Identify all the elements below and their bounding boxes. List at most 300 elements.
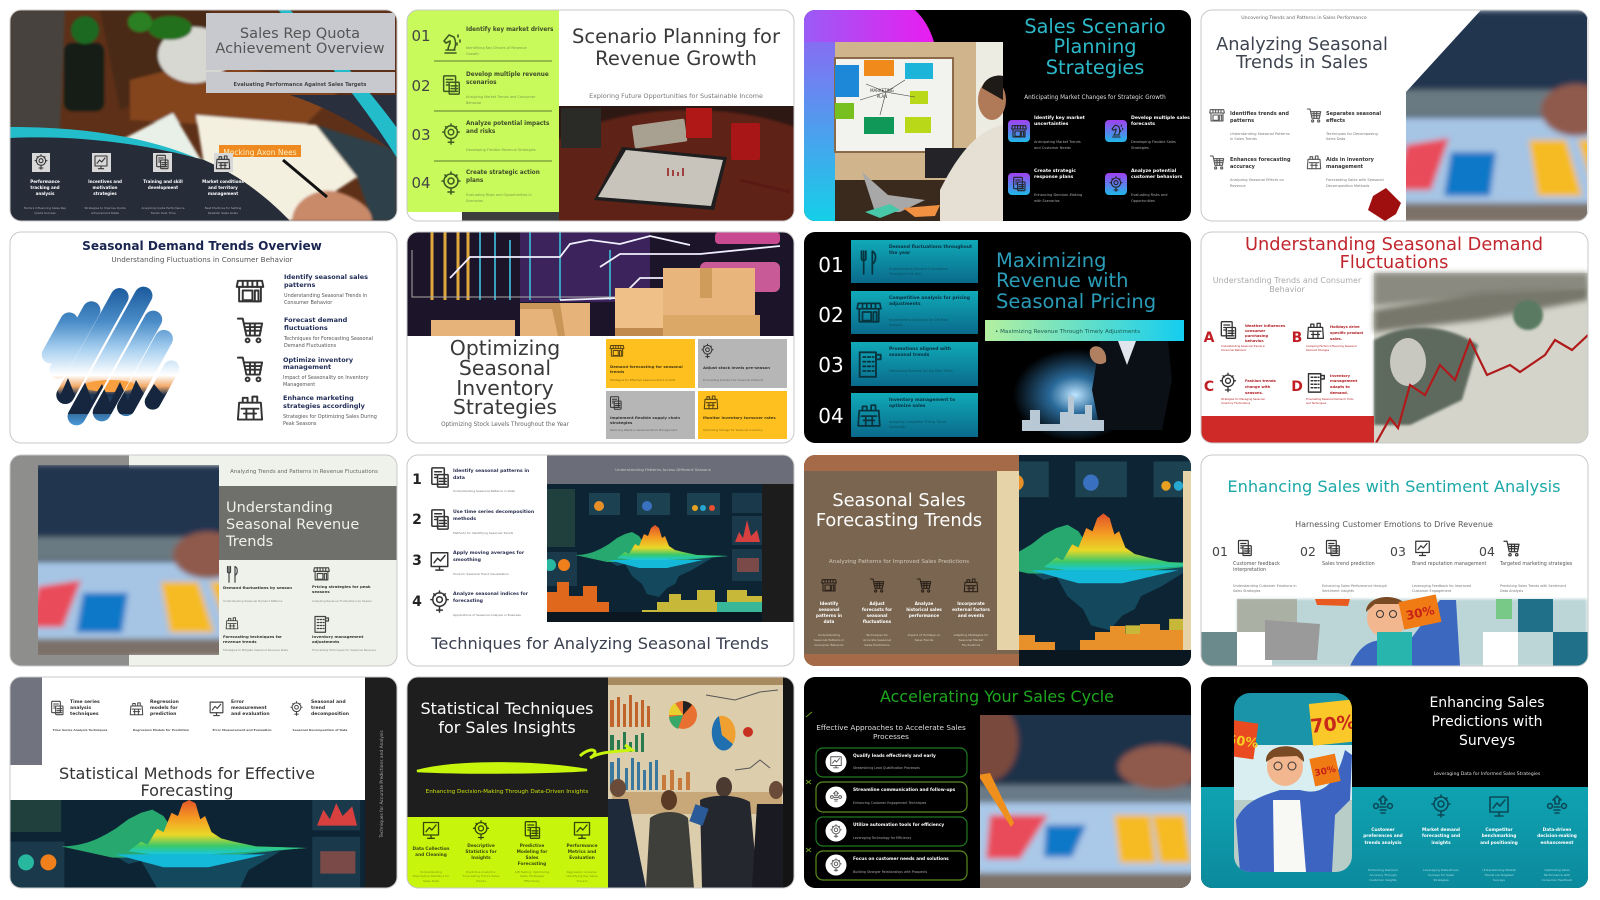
dark wave footer: [10, 137, 290, 221]
label: decomposition: [311, 711, 349, 717]
label: interpretation: [1233, 567, 1266, 573]
item: incorporate: [952, 579, 990, 647]
subtitle: Analyzing Patterns for Improved Sales Predictions: [829, 559, 969, 565]
label: Insights: [471, 855, 491, 861]
beige divider: [997, 471, 1019, 650]
subtitle box: [206, 72, 395, 93]
icon: document: [610, 397, 621, 409]
title: Optimizing: [450, 336, 560, 360]
icon: store: [1210, 110, 1224, 121]
label: methods: [453, 516, 476, 522]
dark side block: [762, 484, 794, 622]
title band: Seasonal Revenue: [226, 517, 359, 533]
header band: Understanding Patterns Across Different Seasons: [615, 467, 711, 472]
caption: Drivers: [577, 879, 588, 883]
title box: [206, 13, 395, 70]
caption: Customer Engagement: [1412, 589, 1452, 593]
panel: slide Seasonal Sales Forecasting Trends: [804, 414, 1341, 707]
label: Use time series decomposition: [453, 509, 534, 515]
label: Identify seasonal patterns in: [453, 468, 529, 474]
item: decision-making: [1537, 796, 1577, 882]
caption: Predictive Analytics:: [466, 870, 496, 874]
subtitle: Optimizing Stock Levels Throughout the Year: [441, 422, 570, 428]
label: Create strategic: [1034, 168, 1076, 174]
label: forecasting: [453, 598, 483, 604]
caption: Seasons: [889, 323, 903, 327]
illustration: cheering man in bookstore with blocks: 30%: [1405, 603, 1436, 623]
label: Optimize inventory: [283, 356, 354, 364]
label: Focus on customer needs and solutions: [853, 856, 949, 862]
label: Inventory management to: [889, 397, 955, 403]
item: forecasts: [1105, 115, 1190, 150]
step: automation: [816, 817, 967, 846]
icon: cart: [238, 358, 262, 381]
caption: Understanding Demand Fluctuations: [889, 267, 948, 271]
caption: Strategies for Effective Seasonal Stock Control: [610, 378, 675, 382]
icon: store: [237, 281, 263, 301]
caption: Evaluating Risks and Opportunities in: [466, 193, 532, 197]
subtitle: Leveraging Data for Informed Sales Strategies: [1434, 771, 1541, 777]
item 1: [412, 468, 529, 493]
label: development: [148, 185, 178, 190]
lime sidebar: [407, 10, 559, 212]
caption: Applications of Seasonal Analysis in Business: [453, 613, 521, 617]
item: time series: [52, 699, 108, 732]
lime footer: [407, 817, 608, 888]
panel: slide Seasonal Demand Trends Overview: [10, 232, 397, 443]
photo: pen pointing at blurred chart: [958, 701, 1202, 898]
step 01: [818, 240, 978, 283]
label: Performance: [30, 179, 60, 184]
photo: man at whiteboard: PLAN: [877, 94, 887, 99]
panel: slide Enhancing Sales Predictions with Surveys: [1201, 677, 1588, 888]
label: decision-making: [1537, 833, 1577, 839]
label: smoothing: [453, 557, 481, 563]
item: adjustments: [312, 616, 376, 652]
label: Forecast demand: [284, 316, 348, 324]
label: management: [1330, 379, 1358, 383]
caption: Optimizing Sales: [1544, 868, 1570, 872]
item: accuracy: [1210, 156, 1291, 188]
icon: chart: [431, 553, 448, 570]
icon: document: [1326, 540, 1339, 556]
panel: slide Maximizing Revenue with Seasonal Pricing: [804, 232, 1191, 443]
caption: Trends via Targeted: [1483, 873, 1514, 877]
label: Time series: [70, 699, 100, 705]
caption: Analyzing Competitor Pricing Trends: [889, 420, 947, 424]
title: Inventory: [456, 376, 554, 400]
label: Competitor: [1485, 827, 1513, 833]
caption: Analyzing Seasonal Effects on: [1230, 178, 1284, 182]
icon: gear head: [431, 591, 448, 612]
label: Streamline communication and follow-ups: [853, 787, 956, 793]
chart: wide rainbow dashboard: [10, 800, 365, 888]
caption: Strategies: [1131, 146, 1149, 150]
caption: Realistic Sales Goals: [208, 211, 238, 215]
label: measurement: [231, 705, 268, 711]
icon: document: [52, 701, 63, 715]
caption: Revenue: [1230, 184, 1246, 188]
label: Statistics for: [465, 849, 497, 855]
icon: badge: [826, 786, 846, 808]
number: 02: [411, 77, 431, 95]
item: predictive modeling: [515, 822, 550, 883]
label: Inventory management: [312, 634, 363, 639]
caption: Forecasting Techniques for Seasonal Revenue: [312, 648, 376, 652]
title: Sales Scenario: [1024, 15, 1166, 38]
label: Sales: [526, 855, 539, 861]
title: Maximizing: [996, 249, 1107, 272]
item 02: [411, 72, 549, 105]
label: Forecasting techniques for: [223, 634, 282, 639]
label: and evaluation: [231, 711, 270, 717]
label: Pricing strategies for peak: [312, 584, 371, 589]
label: Analyze potential: [1131, 168, 1177, 174]
caption: Strategies to Mitigate Seasonal Revenue Risks: [223, 648, 289, 652]
icon: gear: [35, 155, 47, 169]
label: demand.: [1330, 391, 1349, 395]
caption: Strategies for Managing Seasonal: [1221, 397, 1265, 401]
dark right band with vertical caption: Techniques for Accurate Predictions and Analysis: [379, 730, 385, 839]
item C: [1204, 373, 1277, 405]
label: and Cleaning: [415, 852, 447, 858]
item: peak pricing: [312, 568, 372, 603]
label: data: [824, 619, 834, 624]
title: Forecasting: [140, 781, 234, 800]
label: Enhances forecasting: [1230, 157, 1291, 163]
label: Adjust: [869, 601, 885, 606]
label: seasons.: [1245, 391, 1264, 395]
label: Forecasting: [518, 861, 546, 867]
icon: box: [858, 405, 880, 426]
item: Training: [141, 153, 185, 215]
label: strategies: [610, 420, 633, 425]
title: Planning: [1053, 35, 1137, 58]
icon: box: [704, 396, 718, 409]
card: supply chain: [606, 391, 695, 439]
caption: Surveys for Sales: [1428, 873, 1454, 877]
item: performance metrics: [566, 822, 598, 883]
icon: cart: [1210, 156, 1224, 169]
item: sales patterns: [237, 273, 368, 306]
caption: Seasonally: [889, 425, 906, 429]
label: techniques: [70, 711, 99, 717]
label: Evaluation: [569, 855, 595, 861]
step 03: [818, 342, 978, 386]
subtitle: Behavior: [1269, 285, 1305, 294]
item: demand forecasting: [1422, 795, 1460, 882]
caption: Performance with: [1544, 873, 1570, 877]
caption: Accuracy Through: [1369, 873, 1397, 877]
illustration: man with percentage signs: 70%: [1309, 711, 1357, 738]
label: strategies: [93, 191, 117, 196]
caption: Data Analysis: [1500, 589, 1523, 593]
icon: document: [157, 155, 168, 169]
caption: Understanding: [420, 870, 442, 874]
caption: Techniques for Decomposing: [1325, 132, 1378, 136]
letter: B: [1292, 330, 1302, 346]
label: sales.: [1330, 337, 1343, 341]
caption: Understanding: [818, 633, 840, 637]
label: data: [453, 475, 465, 481]
label: Customer feedback: [1233, 561, 1280, 567]
chart: zoomed rainbow dashboard: [1019, 455, 1191, 666]
item: trends: [1210, 110, 1290, 141]
caption: Surveys: [1493, 878, 1505, 882]
photo: blurred chart: [38, 465, 219, 655]
icon: cart: [870, 579, 884, 592]
icon: cart: [1504, 541, 1519, 556]
label: preferences and: [1363, 833, 1403, 839]
label: management: [1326, 164, 1364, 170]
caption: Factors Influencing Sales Rep: [24, 206, 66, 210]
caption: Leveraging Technology for Efficiency: [853, 836, 911, 840]
label: adapts to: [1330, 385, 1350, 389]
caption: Implementing Discounts for Off-Peak: [889, 318, 948, 322]
chart: rainbow dashboard: [547, 484, 762, 622]
title: Understanding Seasonal Demand: [1245, 234, 1543, 255]
cyan ribbon left: [10, 127, 206, 162]
item: inventory: [1307, 156, 1384, 188]
title: Analyzing Seasonal: [1216, 35, 1388, 55]
panel: slide Analyzing Seasonal Trends in Sales: [1201, 10, 1600, 223]
caption: Fluctuations: [962, 643, 981, 647]
caption: Peak Seasons: [283, 421, 317, 427]
item 04: [1479, 541, 1573, 593]
title band: Understanding: [226, 500, 333, 516]
label: Data Collection: [413, 846, 449, 852]
gradient left strip: [804, 10, 835, 221]
label: Enhance marketing: [283, 394, 354, 402]
title box: Achievement Overview: [215, 40, 385, 57]
icon: knight: [1112, 125, 1123, 137]
caption: Leveraging Data-Driven: [1423, 868, 1459, 872]
teal band: [1201, 787, 1588, 888]
icon: grid: [1308, 374, 1324, 392]
number: 3: [412, 553, 422, 569]
caption: Demand Changes: [1306, 348, 1330, 352]
item: behaviors: [1105, 168, 1183, 203]
caption: Methods for Identifying Seasonal Trends: [453, 531, 513, 535]
panel: slide Understanding Seasonal Demand Fluctuations: [1201, 232, 1588, 443]
item A: [1204, 322, 1286, 352]
label: forecasting and: [1422, 833, 1460, 839]
label: Demand fluctuations by season: [223, 585, 292, 590]
label: Identify key market drivers: [466, 27, 554, 33]
label: motivation: [93, 185, 118, 190]
label: change with: [1245, 385, 1271, 389]
item B: [1292, 323, 1363, 352]
number: 04: [1479, 544, 1495, 559]
illustration: diagonal pills with crowd: [30, 280, 190, 430]
cyan ribbon right: [278, 10, 397, 158]
label: strategies accordingly: [283, 402, 366, 410]
label: fluctuations: [863, 619, 892, 624]
caption: Sentiment Insights: [1322, 589, 1354, 593]
icon: store: [857, 303, 881, 322]
caption: Adapting Strategies for: [954, 633, 989, 637]
icon: cart: [1307, 109, 1321, 122]
label: seasonal: [819, 607, 840, 612]
label: Qualify leads effectively and early: [853, 753, 936, 759]
photo: desk with notebook and plant: Mocking Axon Nees: [223, 148, 297, 157]
dark footer block: [462, 212, 559, 221]
caption: Management: [283, 382, 315, 388]
icon: document: [1238, 540, 1251, 556]
label: Competitive analysis for pricing: [889, 295, 970, 301]
label: prediction: [150, 711, 176, 717]
caption: Time Series Analysis Techniques: [53, 728, 108, 732]
label: and positioning: [1480, 840, 1518, 846]
label: and events: [958, 613, 985, 618]
card: demand forecasting: [606, 339, 695, 388]
subtitle: Processes: [873, 732, 909, 741]
caption: Consumer Behavior: [1221, 348, 1248, 352]
label: Implement flexible supply chain: [610, 415, 680, 420]
item 4: [412, 591, 529, 617]
caption: in Sales Trends: [1230, 137, 1257, 141]
title: Seasonal Demand Trends Overview: [82, 239, 322, 253]
item: analyze: [906, 579, 942, 642]
brush stroke: [417, 763, 587, 773]
panel: slide Statistical Methods for Effective Forecasting: [10, 677, 397, 888]
label: Aids in inventory: [1326, 157, 1375, 163]
icon: fork and knife: [228, 566, 237, 582]
caption: Regression Models for Prediction: [133, 728, 189, 732]
number: 02: [1300, 544, 1316, 559]
caption: A/B Testing: Optimizing: [515, 870, 550, 874]
red hexagon: [1368, 188, 1401, 221]
label: Performance: [566, 843, 598, 849]
caption: Opportunities: [1131, 199, 1155, 203]
chart footer strip: [1019, 650, 1191, 666]
label: Fashion trends: [1245, 379, 1277, 383]
caption: Optimizing Storage for Seasonal Inventory: [703, 428, 763, 432]
label: Targeted marketing strategies: [1499, 561, 1573, 567]
caption: Effectively: [524, 879, 540, 883]
caption: Strategies: [1433, 878, 1449, 882]
icon: chart: [424, 822, 438, 838]
number: 4: [412, 594, 422, 610]
caption: Scenarios: [466, 199, 483, 203]
label: Regression: [150, 699, 179, 705]
caption: Techniques for: [865, 633, 889, 637]
number: 1: [412, 472, 422, 488]
grey corner block: [10, 677, 42, 765]
label: Utilize automation tools for efficiency: [853, 822, 944, 828]
title band: Trends: [225, 534, 273, 550]
panel: slide Enhancing Sales with Sentiment Analysis: [1201, 455, 1588, 666]
title: Scenario Planning for: [572, 25, 781, 48]
step: customer focus: [816, 851, 967, 880]
photo: boxes and neon charts: [407, 232, 794, 336]
number: 04: [411, 174, 431, 192]
icon: box: [130, 703, 143, 715]
icon: grid: [860, 352, 881, 377]
step: qualify leads: [816, 748, 967, 777]
title: Fluctuations: [1340, 252, 1448, 273]
label: Market demand: [1422, 827, 1460, 833]
illustration: man with percentage signs: 50%: [1226, 733, 1259, 752]
item: benchmarking: [1480, 797, 1518, 882]
caption: Strategies for Optimizing Sales During: [283, 414, 377, 420]
photo: man at whiteboard: [835, 42, 1006, 221]
label: analysis: [70, 705, 91, 711]
label: trends: [610, 369, 625, 374]
icon: document list: [432, 510, 448, 529]
label: Identify seasonal sales: [284, 273, 368, 281]
title: Strategies: [1046, 56, 1144, 79]
item 3: [412, 550, 525, 576]
caption: Sales Data: [1326, 137, 1345, 141]
caption: Understanding Seasonal Trends in: [284, 293, 367, 299]
label: consumer: [1245, 329, 1266, 333]
icon: badge: [826, 854, 846, 876]
step: streamline communication: [816, 782, 967, 812]
icon: fork and knife: [862, 251, 876, 274]
grey side block: [10, 455, 129, 666]
icon: document: [432, 468, 448, 487]
label: Customer: [1371, 827, 1396, 833]
label: Modeling for: [517, 849, 548, 855]
caption: Understanding Customer Emotions in: [1233, 584, 1297, 588]
caption: Trends Over Time: [149, 211, 176, 215]
caption: Sales Trends: [915, 638, 934, 642]
subtitle: Exploring Future Opportunities for Sustainable Income: [589, 92, 763, 100]
caption: Developing Flexible Revenue Strategies: [466, 148, 536, 152]
icon: cart: [238, 319, 262, 342]
icon: document: [1014, 177, 1025, 191]
number: 03: [411, 126, 431, 144]
icon: badge: [826, 820, 846, 842]
panel: slide Sales Rep Quota Achievement Overview: [10, 10, 397, 221]
label: enhancement: [1541, 840, 1573, 846]
item: decomposition: [291, 699, 349, 732]
caption: Analyzing Quota Performance: [141, 206, 185, 210]
caption: Techniques for Forecasting Seasonal: [283, 336, 373, 342]
caption: Tools for Seasonal Trend Visualization: [452, 572, 509, 576]
label: purchasing: [1245, 334, 1268, 338]
caption: Analyzing Revenue Fluctuations by Season: [312, 599, 372, 603]
icon: store: [1012, 126, 1026, 137]
caption: Identifying Key Sales: [566, 874, 598, 878]
icon: document: [525, 822, 540, 838]
label: Demand fluctuations throughout: [889, 244, 973, 250]
caption: Understanding Seasonal Trends in: [1221, 344, 1265, 348]
label: Error: [231, 699, 245, 705]
label: management: [283, 363, 331, 371]
icon: chart: [210, 702, 223, 716]
title: Techniques for Analyzing Seasonal Trends: [430, 634, 769, 653]
number: 01: [1212, 544, 1228, 559]
number: 03: [818, 353, 844, 377]
label: specific product: [1330, 331, 1363, 335]
label: Demand forecasting for seasonal: [610, 364, 683, 369]
caption: Sales Strategies: [520, 874, 545, 878]
label: tracking and: [30, 185, 60, 190]
item: demand: [238, 316, 373, 349]
icon: box: [226, 618, 238, 629]
label: Incentives and: [88, 179, 122, 184]
number: 02: [818, 303, 844, 327]
icon: box: [216, 156, 230, 169]
label: Develop multiple revenue: [466, 72, 549, 78]
caption: with Scenarios: [1034, 199, 1060, 203]
item D: [1291, 374, 1358, 405]
label: trends analysis: [1364, 840, 1402, 846]
item: error: [210, 699, 272, 732]
item: data collection: [413, 822, 450, 883]
